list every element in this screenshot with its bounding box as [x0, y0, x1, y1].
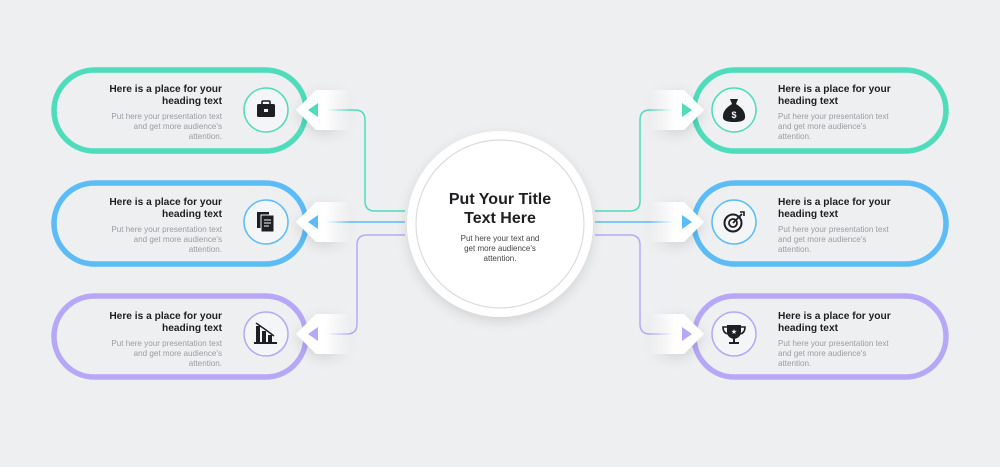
pill: right purple: and get more audience's [778, 349, 866, 358]
pill: right purple [694, 296, 946, 377]
center circle: attention. [484, 254, 516, 263]
pill: right green [694, 70, 946, 151]
pill: left purple: Put here your presentation text [111, 339, 223, 348]
icon: trophy: ★ [731, 328, 737, 336]
pill: left purple: and get more audience's [134, 349, 222, 358]
pill: right blue: heading text [778, 209, 839, 220]
pill: left green: Here is a place for your [109, 84, 222, 95]
pill: left purple [54, 296, 306, 377]
pill: right green: Put here your presentation text [778, 112, 889, 121]
pill: left blue: Put here your presentation text [111, 225, 223, 234]
pill: right purple: attention. [778, 359, 811, 368]
pill: right green: heading text [778, 96, 839, 107]
icon: documents [244, 200, 288, 244]
pill: right blue [694, 183, 946, 264]
center circle: get more audience's [464, 244, 536, 253]
pill: right green: and get more audience's [778, 122, 866, 131]
pill: left blue: and get more audience's [134, 235, 222, 244]
pill: left blue: attention. [189, 245, 222, 254]
icon: money bag: $ [731, 110, 737, 120]
icon: money bag [712, 88, 756, 132]
pill: left purple: Here is a place for your [109, 311, 222, 322]
pill: right green: attention. [778, 132, 811, 141]
center circle: Put Your Title [449, 191, 551, 208]
pill: right blue: Put here your presentation text [778, 225, 889, 234]
arrows left [296, 90, 350, 354]
pill: left blue: Here is a place for your [109, 197, 222, 208]
pill: left purple: attention. [189, 359, 222, 368]
center circle: Text Here [464, 210, 536, 227]
pill: left blue: heading text [162, 209, 223, 220]
pill: right blue: attention. [778, 245, 811, 254]
center circle: Put here your text and [461, 234, 539, 243]
connector lines [318, 110, 683, 334]
arrowheads right [682, 103, 692, 341]
pill: right purple: Here is a place for your [778, 311, 891, 322]
pill: right green: Here is a place for your [778, 84, 891, 95]
pill: left green: Put here your presentation text [111, 112, 223, 121]
center circle [407, 131, 593, 317]
pill: right blue: and get more audience's [778, 235, 866, 244]
icon: trophy [712, 312, 756, 356]
pill: left green: heading text [162, 96, 223, 107]
pill: right blue: Here is a place for your [778, 197, 891, 208]
icon: falling chart [244, 312, 288, 356]
pill: right purple: heading text [778, 323, 839, 334]
icon: briefcase [244, 88, 288, 132]
pill: left purple: heading text [162, 323, 223, 334]
arrows right [650, 90, 704, 354]
pill: right purple: Put here your presentation text [778, 339, 889, 348]
pill: left green [54, 70, 306, 151]
icon: target [712, 200, 756, 244]
pill: left blue [54, 183, 306, 264]
pill: left green: attention. [189, 132, 222, 141]
arrowheads left [308, 103, 318, 341]
pill: left green: and get more audience's [134, 122, 222, 131]
